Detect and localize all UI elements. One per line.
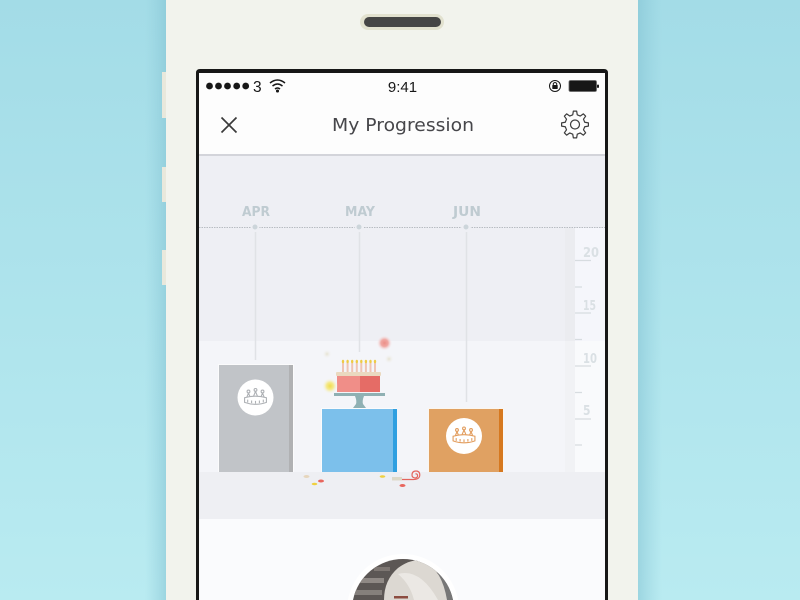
month labels: JUN bbox=[452, 205, 481, 220]
confetti on floor bbox=[304, 475, 406, 487]
ruler labels: 15 bbox=[583, 298, 596, 314]
cake stand bbox=[334, 393, 385, 408]
screen bbox=[199, 73, 605, 600]
close icon bbox=[222, 118, 236, 132]
rotation lock icon bbox=[550, 80, 560, 92]
profile area bbox=[199, 519, 605, 600]
floor bbox=[199, 472, 605, 519]
ruler labels: 5 bbox=[583, 403, 590, 419]
speaker bbox=[360, 14, 444, 30]
cake body bbox=[337, 376, 360, 392]
flames bbox=[342, 360, 376, 363]
ruler ticks bbox=[575, 260, 591, 445]
ruler labels bbox=[583, 245, 599, 419]
carrier: 3 bbox=[253, 79, 262, 96]
battery icon bbox=[569, 80, 599, 92]
drop lines bbox=[256, 232, 466, 402]
bar: April bbox=[218, 364, 294, 472]
ruler scale bbox=[565, 228, 605, 472]
phone body bbox=[166, 0, 638, 600]
settings gear icon bbox=[562, 111, 588, 138]
clock: 9:41 bbox=[388, 79, 417, 96]
status bar bbox=[206, 79, 599, 96]
icon: April cake badge bbox=[238, 380, 274, 416]
profile avatar bbox=[353, 559, 453, 600]
title: My Progression bbox=[332, 115, 474, 136]
avatar ring bbox=[348, 554, 458, 600]
birthday cake on stand bbox=[334, 360, 385, 408]
candles bbox=[342, 363, 376, 372]
month labels bbox=[242, 205, 481, 220]
avatar photo bbox=[353, 559, 453, 600]
chart upper background bbox=[199, 156, 605, 341]
month markers bbox=[252, 224, 470, 230]
chart lower background bbox=[199, 341, 605, 472]
month labels: MAY bbox=[345, 205, 376, 220]
dotted axis line bbox=[199, 226, 605, 228]
ruler labels: 20 bbox=[583, 245, 599, 261]
wifi icon bbox=[270, 80, 285, 92]
nav area bbox=[199, 73, 605, 154]
confetti glows bbox=[322, 335, 394, 394]
cake frosting bbox=[336, 372, 381, 376]
signal dots bbox=[206, 83, 249, 89]
month axis bbox=[199, 205, 605, 402]
nav divider bbox=[199, 154, 605, 156]
icon: June cake badge bbox=[446, 418, 482, 454]
bar: June bbox=[428, 408, 504, 472]
phone screen bezel bbox=[196, 69, 608, 600]
month labels: APR bbox=[242, 205, 270, 220]
ruler labels: 10 bbox=[583, 351, 597, 367]
phone side buttons bbox=[162, 72, 167, 285]
party blower bbox=[392, 471, 420, 480]
bar: May bbox=[321, 408, 397, 472]
